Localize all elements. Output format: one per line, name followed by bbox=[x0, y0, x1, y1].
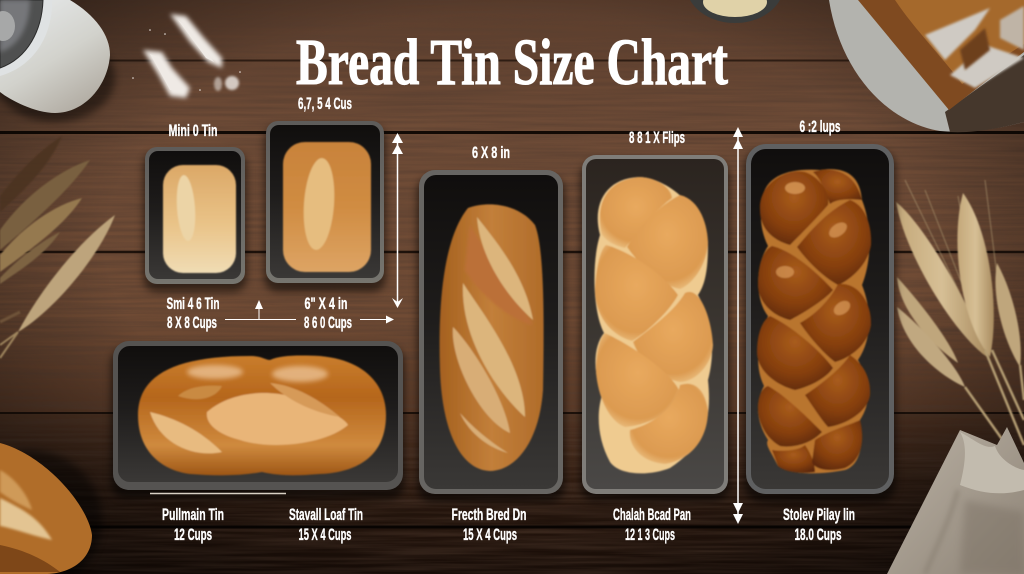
bottom labels: Stavall Loaf Tin bbox=[289, 505, 363, 524]
underline: pullman width bbox=[150, 492, 286, 494]
wheat right bbox=[896, 180, 1024, 470]
top labels: 6 :2 lups bbox=[800, 118, 840, 136]
pan 4: french bread tin bbox=[417, 170, 565, 502]
icon: white jar bbox=[0, 0, 115, 122]
bottom labels: 15 X 4 Cups bbox=[463, 525, 517, 544]
bread: golden challah bbox=[594, 177, 713, 473]
bottom labels: Pullmain Tin bbox=[162, 505, 224, 524]
top labels: Mini 0 Tin bbox=[168, 122, 218, 140]
top labels: 6 X 8 in bbox=[472, 144, 510, 162]
bottom labels: Chalah Bcad Pan bbox=[613, 505, 691, 524]
bottom labels: Frecth Bred Dn bbox=[452, 505, 526, 524]
flour dusting bbox=[132, 14, 241, 98]
arrow: vertical height, tall pans bbox=[733, 127, 743, 524]
arrow: vertical height, small pans bbox=[392, 133, 403, 308]
pan 6: dark braided pan bbox=[744, 144, 896, 502]
bread: golden small loaf bbox=[283, 142, 371, 272]
wheat left bbox=[0, 136, 115, 358]
bread: pullman loaf bbox=[138, 355, 386, 475]
marble plate with bread bbox=[829, 0, 1024, 132]
middle labels: 8 X 8 Cups bbox=[167, 314, 217, 332]
pan 5: challah pan bbox=[580, 155, 730, 501]
bottom labels: 12 1 3 Cups bbox=[625, 525, 675, 544]
middle labels: 8 6 0 Cups bbox=[304, 314, 352, 332]
title: Bread Tin Size Chart bbox=[296, 26, 728, 99]
arrow: horizontal and up, small pans bbox=[225, 300, 296, 320]
small bowl bbox=[690, 0, 780, 23]
top labels: 8 8 1 X Flips bbox=[629, 129, 685, 147]
middle labels: Smi 4 6 Tin bbox=[166, 295, 220, 313]
middle labels: 6" X 4 in bbox=[304, 295, 348, 313]
top labels bbox=[168, 95, 840, 162]
pan 2: small loaf bbox=[264, 121, 386, 292]
bottom labels: Stolev Pilay lin bbox=[783, 505, 855, 524]
linen napkin bbox=[887, 427, 1024, 574]
bottom labels bbox=[162, 505, 855, 544]
bottom labels: 15 X 4 Cups bbox=[298, 525, 352, 544]
top labels: 6,7, 5 4 Cus bbox=[298, 95, 352, 113]
bottom labels: 18.0 Cups bbox=[794, 525, 842, 544]
pan 3: pullman tin bbox=[111, 341, 405, 499]
bottom labels: 12 Cups bbox=[174, 525, 212, 544]
bread: french loaf bbox=[440, 204, 544, 471]
bread: dark braided loaf bbox=[757, 169, 871, 473]
pan 1: mini tin bbox=[143, 147, 247, 292]
bread: pale mini loaf bbox=[163, 165, 236, 273]
arrow: right pointer bbox=[360, 316, 394, 324]
bread bottom left bbox=[0, 443, 102, 574]
middle labels bbox=[166, 295, 352, 332]
